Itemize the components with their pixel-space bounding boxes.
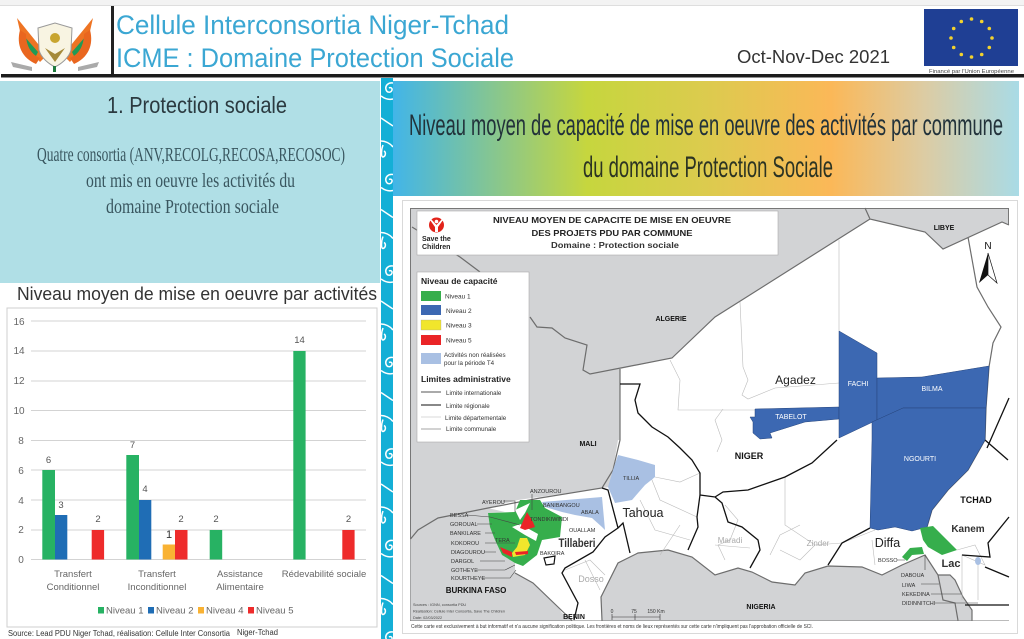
header: title: ICME : Domaine Protection Sociale <box>116 43 514 73</box>
scale bar: 0 <box>611 609 614 615</box>
bars: redevabilite sociale <box>293 335 355 560</box>
map sources: Réalisation: Cellule Inter Consortia, Save The Children <box>413 610 505 614</box>
map labels: MALI <box>579 441 597 448</box>
axis labels <box>13 317 25 566</box>
text block: consortia: domaine Protection sociale <box>106 196 279 218</box>
decorative strip <box>381 78 393 639</box>
panel: protection sociale intro <box>0 81 380 283</box>
map legend: Niveau 5 <box>446 338 472 344</box>
source note: Source: Lead PDU Niger Tchad, réalisation: Cellule Inter Consortia <box>8 629 231 638</box>
commune labels: ABALA <box>581 510 599 516</box>
commune labels: BESSA <box>450 513 469 519</box>
commune labels: BANKILARE <box>450 531 481 537</box>
map legend: Niveau de capacité <box>421 276 498 286</box>
map labels: TCHAD <box>960 495 992 505</box>
commune labels: KEKEDINA <box>902 592 930 598</box>
map labels: BURKINA FASO <box>446 586 506 595</box>
icon: north arrow: N <box>984 241 992 252</box>
commune labels: KOKOROU <box>451 541 479 547</box>
bars: transfert inconditionnel: 4 <box>142 484 148 495</box>
map labels: Tahoua <box>622 506 664 520</box>
commune labels: TILLIA <box>623 476 640 482</box>
map title box: Domaine : Protection sociale <box>551 241 680 250</box>
map sources <box>413 603 505 620</box>
map labels: Diffa <box>875 536 900 550</box>
chart heading: Niveau moyen de mise en oeuvre par activités <box>17 283 377 304</box>
map labels: LIBYE <box>934 225 955 232</box>
map disclaimer: Cette carte est exclusivement à but informatif et n'a aucune signification politique. Les frontières et noms de lieux représentés sur cette carte n'impliquent pas l'approbation officielle de SCI. <box>411 624 813 630</box>
map sources: Sources : IGNN, consortia PDU <box>413 603 466 607</box>
communes: Tabelot, Fachi, Bilma, Ngourti (niveau 2) <box>750 331 989 531</box>
communes: niveau 3 <box>512 538 530 557</box>
communes: niveau 1 Diffa, Lac <box>902 526 957 561</box>
chart legend: Niveau 2 <box>156 606 194 616</box>
map legend <box>417 272 529 442</box>
chart legend: Niveau 5 <box>256 606 294 616</box>
map legend: Limite régionale <box>446 403 490 410</box>
map legend: Limite internationale <box>446 390 502 397</box>
category labels: Alimentaire <box>216 582 264 593</box>
commune labels: BAKOIRA <box>540 551 565 557</box>
map title box <box>417 211 778 255</box>
communes: activités non réalisées <box>542 455 655 530</box>
commune labels: OUALLAM <box>569 528 596 534</box>
category labels: Transfert <box>54 569 92 580</box>
map title box: DES PROJETS PDU PAR COMMUNE <box>532 229 693 238</box>
lake <box>544 556 555 565</box>
bars: assistance alimentaire: 2 <box>213 514 219 525</box>
category labels: Assistance <box>217 569 263 580</box>
heading: protection sociale: 1. Protection sociale <box>107 92 287 118</box>
commune labels: DABOUA <box>901 573 925 579</box>
icon: Save the Children logo: Children <box>422 244 450 251</box>
axis labels: 4 <box>18 496 24 507</box>
axis labels: 12 <box>13 376 25 387</box>
commune labels: GOTHEYE <box>451 568 478 574</box>
commune labels: BANIBANGOU <box>543 503 580 509</box>
header: emblem of Niger <box>11 18 99 72</box>
map labels: Lac <box>942 558 960 570</box>
header: title <box>116 10 514 73</box>
bars: assistance alimentaire <box>210 514 222 560</box>
map legend: Limite départementale <box>445 415 507 422</box>
map title box: NIVEAU MOYEN DE CAPACITE DE MISE EN OEUVRE <box>493 216 732 225</box>
scale bar <box>611 609 665 620</box>
map legend: pour la période T4 <box>444 360 495 367</box>
bars: transfert inconditionnel: 1 <box>166 529 172 541</box>
map labels: Maradi <box>718 536 742 545</box>
axis labels: 14 <box>13 346 25 357</box>
axis labels: 8 <box>18 436 24 447</box>
commune labels: NGOURTI <box>904 456 936 463</box>
category labels: Conditionnel <box>47 582 99 593</box>
header: EU flag: Financé par l'Union Européenne <box>929 69 1014 75</box>
communes: niveau 1 Tillaberi <box>488 500 562 566</box>
category labels: Rédevabilité sociale <box>282 569 366 580</box>
commune labels: TONDIKIWINDI <box>530 517 569 523</box>
commune labels: BOSSO <box>878 558 898 564</box>
bars: redevabilite sociale: 2 <box>346 514 351 525</box>
departmental lines <box>565 240 985 600</box>
text block: consortia <box>37 144 345 218</box>
bars: transfert inconditionnel: 7 <box>130 440 135 451</box>
map labels: Agadez <box>775 373 816 387</box>
map labels: BENIN <box>563 614 585 621</box>
map sources: Date: 02/03/2022 <box>413 616 442 620</box>
commune labels: DIAGOUROU <box>451 550 485 556</box>
commune labels: AYEROU <box>482 500 505 506</box>
bars: transfert conditionnel: 6 <box>46 455 51 466</box>
commune labels: TERA <box>495 538 510 544</box>
chart legend: Niveau 1 <box>106 606 144 616</box>
commune labels: BILMA <box>921 386 943 393</box>
category labels <box>47 569 366 593</box>
regional borders <box>562 384 1009 620</box>
text block: consortia: Quatre consortia (ANV,RECOLG,RECOSA,RECOSOC) <box>37 144 345 166</box>
axis labels: 16 <box>13 317 25 328</box>
commune labels: TABELOT <box>775 414 807 421</box>
axis labels: 10 <box>13 406 25 417</box>
bars: transfert conditionnel <box>42 455 104 560</box>
map legend: Limites administrative <box>421 374 511 384</box>
map labels: NIGER <box>735 451 764 461</box>
scale bar: 150 Km <box>647 609 665 615</box>
axis labels: 0 <box>18 555 24 566</box>
map legend: Activités non réalisées <box>444 352 506 359</box>
header: EU flag <box>924 9 1018 75</box>
international borders <box>410 208 1009 620</box>
map labels: Zinder <box>807 539 830 548</box>
communes: niveau 5 <box>500 512 535 557</box>
map labels: Tillaberi <box>558 536 596 550</box>
chart legend <box>98 606 294 616</box>
icon: Save the Children logo <box>422 218 451 251</box>
commune labels: DIDINNITCHI <box>902 601 936 607</box>
map labels: ALGERIE <box>655 316 687 323</box>
panel: map heading <box>393 81 1019 196</box>
commune labels <box>450 381 943 607</box>
bars: transfert inconditionnel: 2 <box>178 514 184 525</box>
commune labels: LIWA <box>902 583 916 589</box>
map legend: Niveau 3 <box>446 322 472 330</box>
commune labels: ANZOUROU <box>530 489 562 495</box>
map labels: Kanem <box>951 524 985 535</box>
map labels: NIGERIA <box>746 604 776 611</box>
commune labels: FACHI <box>848 381 868 388</box>
map labels: Dosso <box>578 574 604 584</box>
bars: transfert inconditionnel <box>126 440 188 560</box>
axis labels: 6 <box>18 466 24 477</box>
map legend: Niveau 2 <box>446 308 472 315</box>
header: period: Oct-Nov-Dec 2021 <box>737 47 890 67</box>
bars: transfert conditionnel: 3 <box>58 500 64 511</box>
leader lines <box>467 494 978 603</box>
header: title: Cellule Interconsortia Niger-Tchad <box>116 10 509 40</box>
text block: consortia: ont mis en oeuvre les activités du <box>86 170 295 192</box>
panel: map heading: du domaine Protection Sociale <box>583 151 833 184</box>
bars: transfert conditionnel: 2 <box>95 514 101 525</box>
commune labels: KOURTHEYE <box>451 576 485 582</box>
map legend: Niveau 1 <box>445 294 471 300</box>
icon: Save the Children logo: Save the <box>422 236 451 243</box>
bars: redevabilite sociale: 14 <box>294 335 305 346</box>
panel: map <box>402 200 1018 634</box>
axis labels: 2 <box>18 525 24 536</box>
Nigeria <box>601 550 972 620</box>
icon: north arrow <box>979 241 997 283</box>
Niger and Chad land <box>410 219 1009 620</box>
map labels <box>446 225 992 621</box>
commune labels: DARGOL <box>451 559 474 565</box>
bar chart: niveau moyen par activités <box>7 308 377 627</box>
map legend: Limite communale <box>446 426 497 433</box>
chart legend: Niveau 4 <box>206 606 244 616</box>
source note: Niger-Tchad <box>237 628 278 637</box>
scale bar: 75 <box>631 609 637 615</box>
commune labels: GOROUAL <box>450 522 478 528</box>
category labels: Transfert <box>138 569 176 580</box>
category labels: Inconditionnel <box>128 582 186 593</box>
